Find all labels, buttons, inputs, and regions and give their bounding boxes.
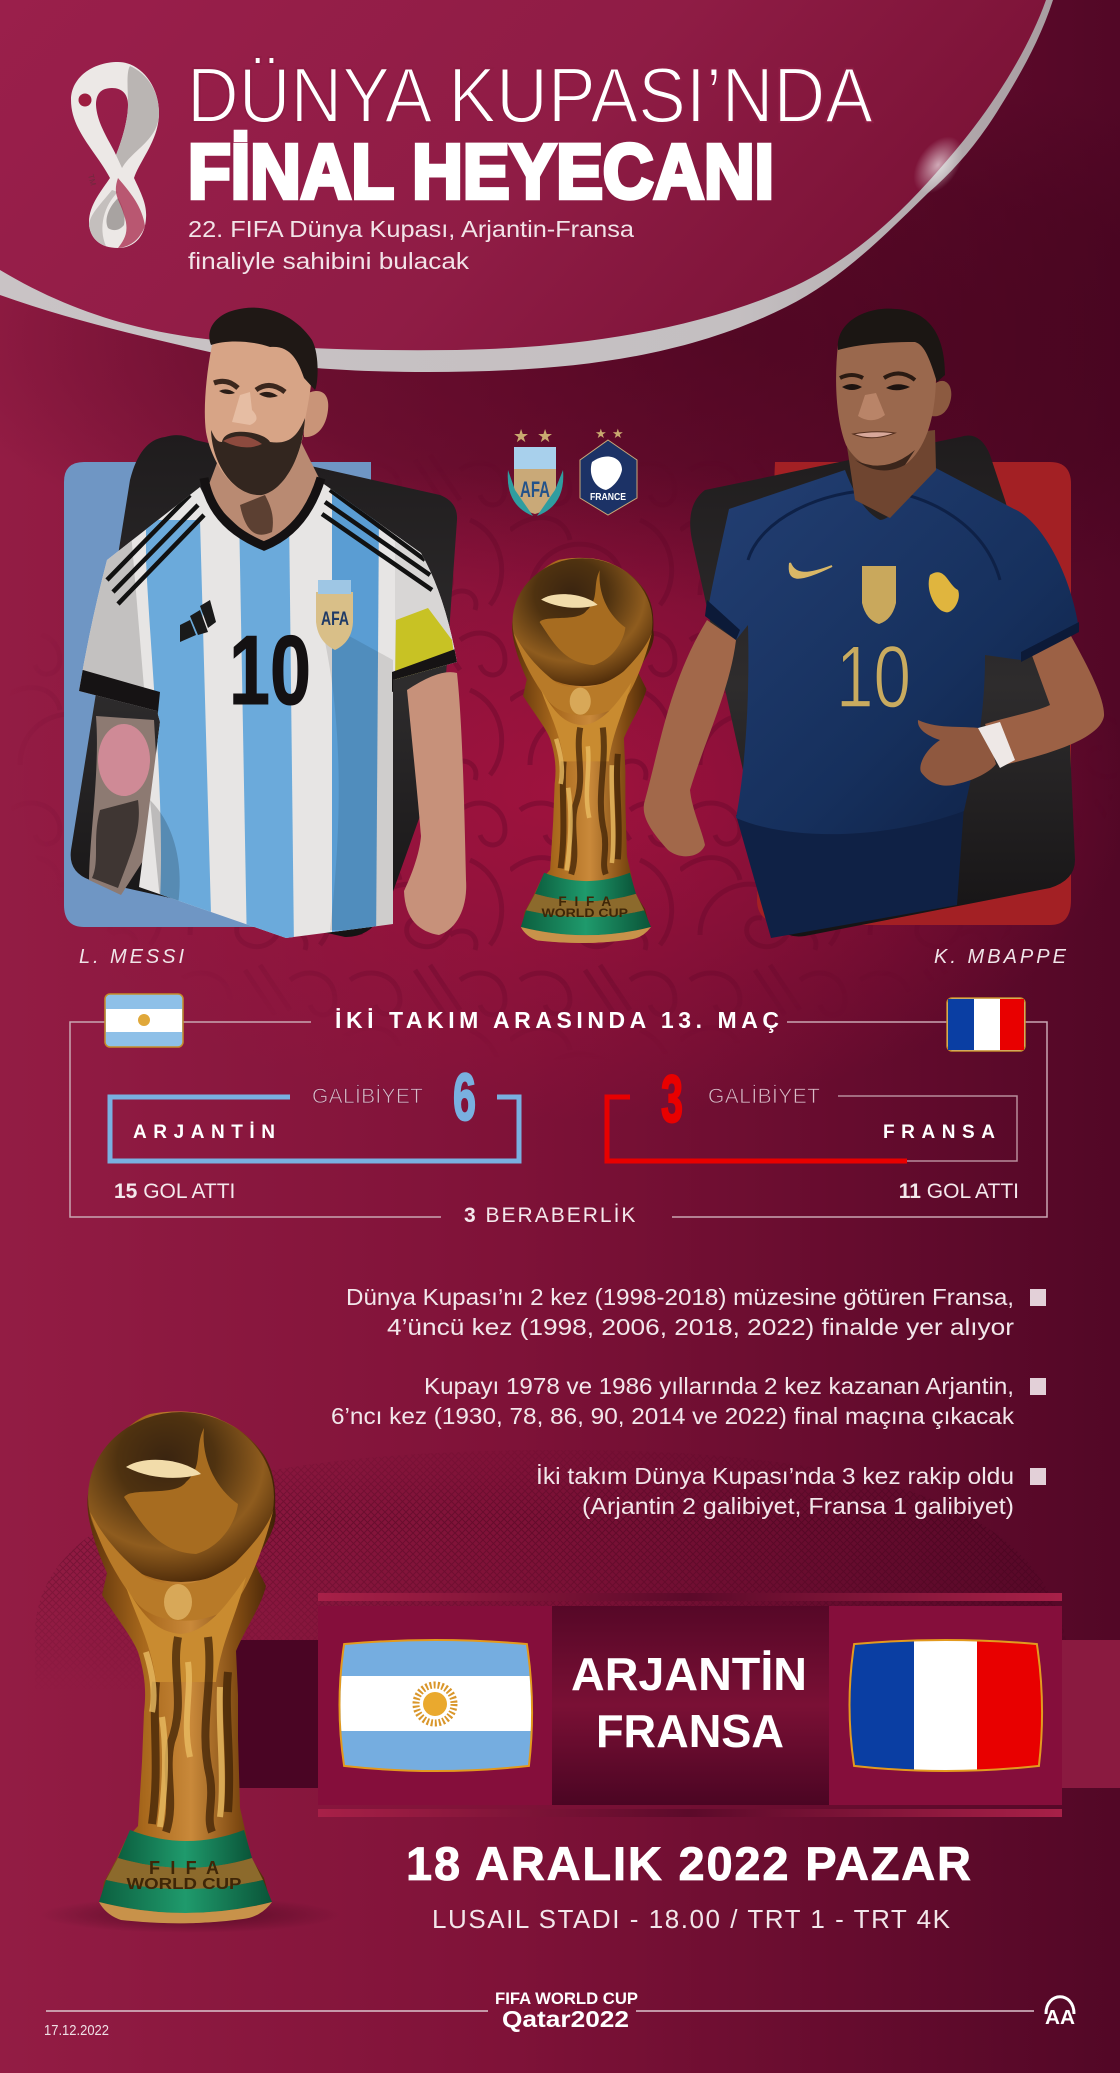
flag: France small	[947, 998, 1025, 1051]
Argentina wins label: GALİBİYET	[312, 1085, 423, 1108]
black panel	[690, 435, 1075, 937]
crest: AFA	[321, 609, 349, 630]
icon: Qatar 2022 emblem	[71, 62, 159, 248]
hand	[918, 720, 996, 786]
player: Messi	[64, 308, 470, 950]
shirt number: 10	[229, 615, 311, 725]
icon: FFF badge	[580, 426, 637, 515]
head	[205, 308, 328, 495]
crest	[316, 580, 353, 650]
fact 2	[331, 1373, 1046, 1429]
adidas mark	[180, 600, 216, 642]
left arm	[644, 620, 736, 856]
right cuff	[392, 648, 460, 692]
player name: Messi: L. MESSI	[79, 946, 184, 968]
footer	[44, 1989, 1075, 2039]
red panel	[757, 462, 1071, 925]
France name: FRANSA	[883, 1122, 995, 1143]
flag: Argentina	[338, 1639, 534, 1772]
rooster badge	[929, 572, 959, 612]
AA logo: AA	[1045, 2007, 1075, 2029]
text block: facts	[331, 1284, 1046, 1519]
heading line 1: DÜNYA KUPASI’NDA	[187, 51, 873, 139]
top bar	[318, 1593, 1062, 1601]
panel: head-to-head	[70, 994, 1047, 1227]
shirt	[79, 484, 457, 938]
panel: final match	[232, 1593, 1120, 1817]
black panel	[71, 435, 457, 937]
collar	[204, 478, 321, 546]
tattooed left arm	[89, 716, 158, 895]
icon: trophy centre	[512, 558, 654, 943]
gold crest	[862, 566, 896, 624]
neck	[205, 440, 325, 552]
right arm	[985, 636, 1104, 766]
player name: Mbappe: K. MBAPPE	[934, 946, 1067, 968]
heading line 2: FİNAL HEYECANI	[188, 129, 774, 215]
neck	[846, 430, 936, 518]
header dome	[0, 0, 1050, 352]
centre cell	[552, 1606, 829, 1805]
shirt number: 10	[836, 627, 911, 726]
silver arc	[0, 0, 1053, 372]
AA logo	[1045, 1997, 1075, 2029]
wristband	[978, 722, 1015, 768]
FIFA logo wordmark	[495, 1989, 638, 2032]
team name: Fransa: FRANSA	[596, 1705, 784, 1757]
bottom bar	[318, 1809, 1062, 1817]
right arm and hand	[404, 672, 466, 935]
captain armband	[395, 608, 455, 682]
icon: AFA badge	[508, 426, 563, 516]
fact 1: Dünya Kupası’nı 2 kez (1998-2018) müzesine götüren Fransa,	[346, 1284, 1014, 1310]
flag: Argentina small	[105, 994, 183, 1047]
date stamp: 17.12.2022	[44, 2022, 109, 2039]
blue panel	[64, 462, 371, 927]
icon: FFF badge: ★★	[595, 426, 624, 441]
match date: 18 ARALIK 2022 PAZAR	[406, 1837, 971, 1890]
draws: 3 BERABERLİK	[464, 1204, 637, 1227]
Argentina bracket	[110, 1097, 519, 1161]
Argentina wins number: 6	[453, 1060, 476, 1135]
Argentina goals: 15 GOL ATTI	[114, 1180, 235, 1203]
France wins number: 3	[661, 1062, 683, 1137]
player: Mbappe	[644, 309, 1104, 938]
FIFA logo wordmark: FIFA WORLD CUP	[495, 1989, 638, 2008]
fact 3	[536, 1463, 1046, 1519]
icon: FFF badge: FRANCE	[590, 492, 626, 503]
team name: Arjantin: ARJANTİN	[571, 1648, 807, 1700]
France bracket	[607, 1096, 1017, 1161]
head	[836, 309, 951, 470]
left cell	[318, 1606, 552, 1805]
fact 1	[346, 1284, 1046, 1340]
venue and broadcast: LUSAIL STADI - 18.00 / TRT 1 - TRT 4K	[432, 1904, 951, 1934]
France goals: 11 GOL ATTI	[899, 1180, 1019, 1203]
subtitle: finaliyle sahibini bulacak	[188, 248, 470, 274]
icon: trophy large	[40, 1412, 340, 1933]
icon: Qatar 2022 emblem: TM	[86, 173, 98, 187]
right cell	[829, 1606, 1062, 1805]
fact 1: 4’üncü kez (1998, 2006, 2018, 2022) finalde yer alıyor	[387, 1314, 1014, 1340]
panel frame	[70, 1022, 1047, 1217]
icon: AFA badge: ★★	[513, 426, 553, 446]
side band left	[232, 1640, 318, 1788]
fact 3: İki takım Dünya Kupası’nda 3 kez rakip oldu	[536, 1463, 1014, 1489]
heading: İKİ TAKIM ARASINDA 13. MAÇ	[335, 1007, 779, 1033]
shirt	[707, 465, 1079, 834]
side band right	[1062, 1640, 1120, 1788]
fact 3: (Arjantin 2 galibiyet, Fransa 1 galibiyet)	[582, 1493, 1014, 1519]
icon: AFA badge: AFA	[520, 477, 550, 502]
left cuff	[79, 670, 160, 714]
flag: France	[848, 1639, 1044, 1772]
shorts	[736, 806, 964, 938]
nike swoosh	[790, 563, 832, 578]
title	[187, 51, 873, 274]
subtitle: 22. FIFA Dünya Kupası, Arjantin-Fransa	[188, 216, 634, 242]
FIFA logo wordmark: Qatar2022	[502, 2006, 629, 2032]
fact 2: Kupayı 1978 ve 1986 yıllarında 2 kez kazanan Arjantin,	[424, 1373, 1014, 1399]
France wins label: GALİBİYET	[708, 1085, 820, 1108]
fact 2: 6’ncı kez (1930, 78, 86, 90, 2014 ve 2022) final maçına çıkacak	[331, 1403, 1015, 1429]
Argentina name: ARJANTİN	[133, 1122, 275, 1143]
